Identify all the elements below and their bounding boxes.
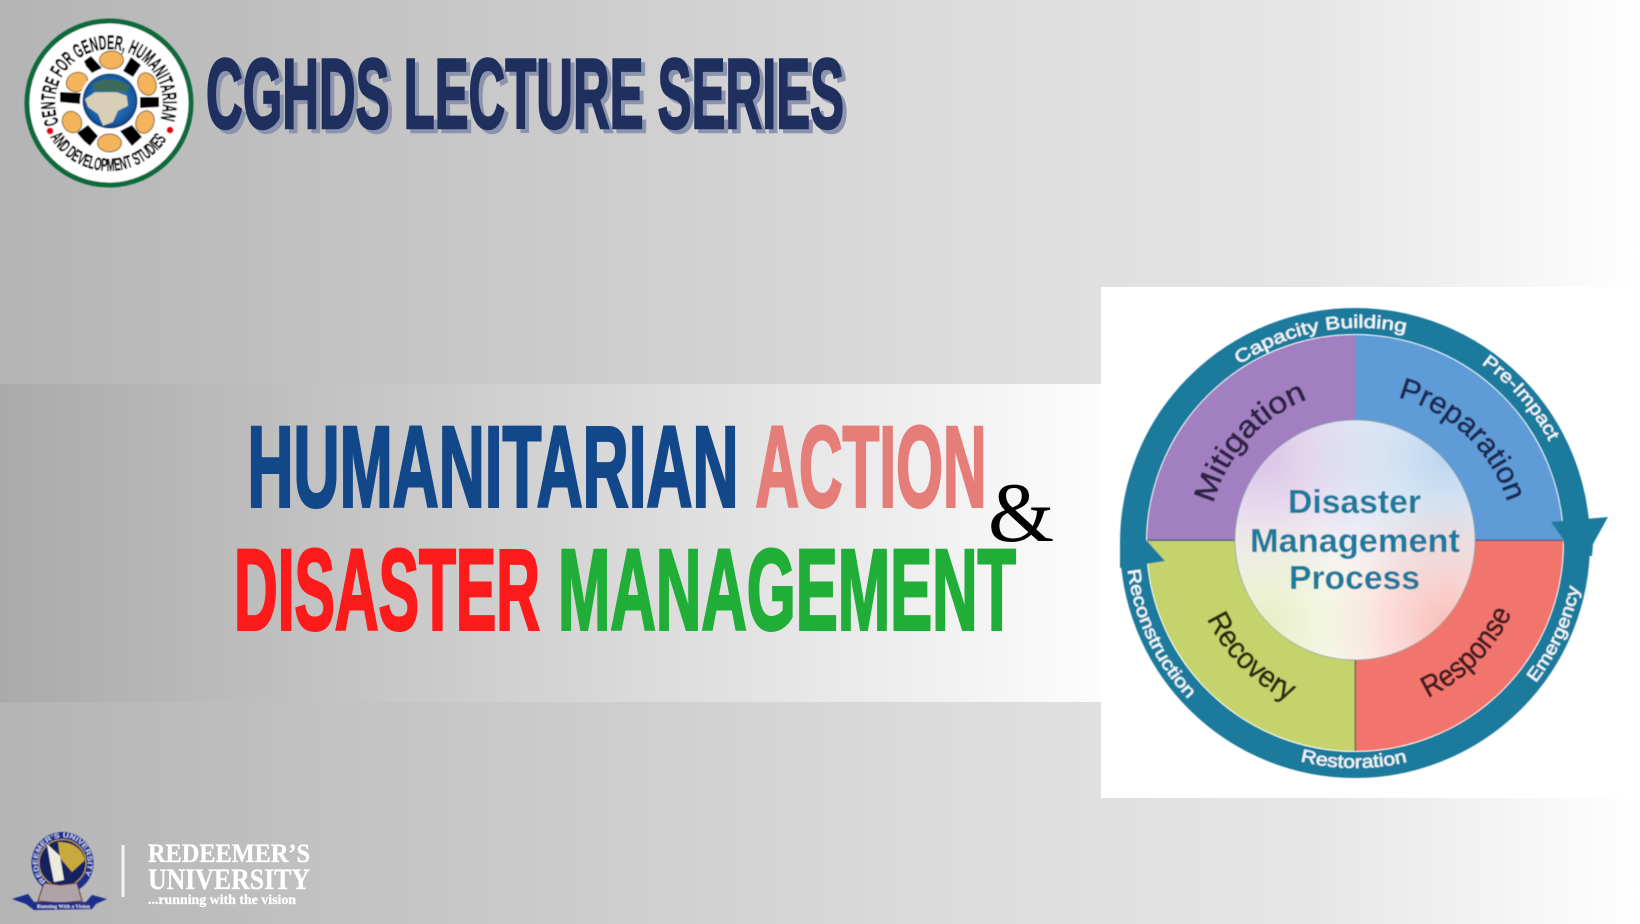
quadrant labels: Preparation: [1400, 377, 1522, 501]
logo clasped hands: [59, 51, 159, 152]
logo ring text: centre name: CENTRE FOR GENDER, HUMANITARIAN: [40, 34, 178, 127]
hub label: Management: [1250, 522, 1460, 559]
ring labels: Capacity Building: [1234, 313, 1408, 363]
chart: disaster management cycle wheel: [1119, 307, 1608, 779]
panel: disaster management process image: [1101, 287, 1640, 798]
quadrants: [1147, 335, 1563, 752]
ribbon: Running With a Vision: [37, 904, 90, 910]
wordmark: Redeemer's University: ...running with the vision: [148, 893, 296, 908]
heading: Humanitarian Action & Disaster Management: [234, 404, 1054, 654]
hub label: Disaster: [1288, 483, 1421, 520]
outer ring: [1133, 321, 1577, 765]
logo ring text: and development studies: AND DEVELOPMENT STUDIES: [50, 132, 166, 172]
divider: [122, 845, 124, 897]
seal ring text: REDEEMER'S UNIVERSITY: [32, 832, 94, 885]
logo globe: [80, 71, 140, 131]
ring labels: Pre-Impact: [1482, 354, 1560, 442]
open book: [38, 883, 82, 903]
quadrant labels: [1149, 332, 1561, 748]
arrow: right arrowhead: [1551, 517, 1608, 556]
central title band: [0, 384, 1101, 702]
hub circle: [1235, 420, 1475, 660]
hub label: [1250, 483, 1460, 596]
logo black arms: [60, 56, 159, 146]
quadrant labels: Mitigation: [1193, 386, 1306, 502]
logo: CGHDS centre emblem: [24, 18, 194, 188]
heading word: Disaster: DISASTER: [234, 526, 540, 654]
quadrant labels: Recovery: [1207, 610, 1297, 703]
wordmark: Redeemer's University: REDEEMER’S: [148, 839, 310, 868]
title: CGHDS Lecture Series: [206, 38, 848, 153]
quadrant: preparation: [1355, 335, 1563, 540]
quadrant labels: Response: [1419, 608, 1510, 698]
ring labels: Emergency: [1526, 584, 1582, 683]
title: CGHDS Lecture Series: CGHDS LECTURE SERIES: [206, 38, 844, 149]
quadrant: mitigation: [1147, 335, 1355, 540]
arrow: left arrowhead: [1120, 540, 1165, 568]
heading word: Humanitarian: HUMANITARIAN: [248, 404, 738, 532]
heading word: Action: ACTION: [756, 404, 986, 532]
heading ampersand: &: [988, 466, 1054, 560]
wordmark: Redeemer's University: UNIVERSITY: [148, 863, 310, 896]
ring labels: Reconstruction: [1126, 568, 1194, 700]
logo: Redeemer's University seal: [12, 831, 108, 911]
ring labels: [1120, 308, 1588, 778]
ring labels: Restoration: [1300, 748, 1408, 770]
wordmark: Redeemer's University: [148, 839, 310, 908]
quadrant: response: [1355, 540, 1563, 752]
hub label: Process: [1289, 559, 1420, 596]
quadrant: recovery: [1147, 540, 1355, 752]
title: CGHDS Lecture Series: CGHDS LECTURE SERIES: [210, 42, 848, 153]
logo red dots: [47, 127, 173, 134]
heading word: Management: MANAGEMENT: [558, 526, 1016, 654]
